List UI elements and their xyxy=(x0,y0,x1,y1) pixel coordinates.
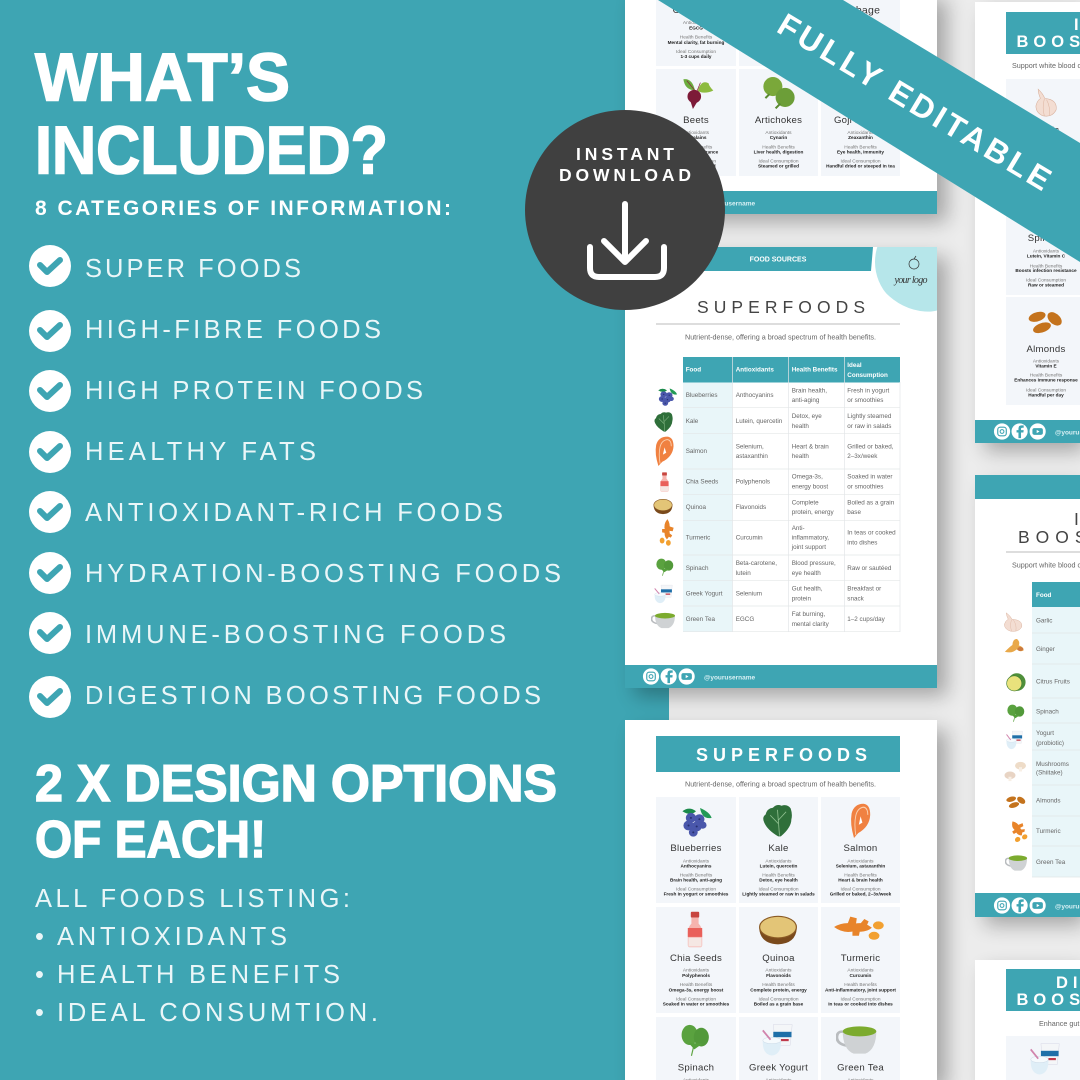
table: Flavonoids xyxy=(736,504,766,511)
table: Lutein, quercetin xyxy=(736,418,783,425)
table: health xyxy=(792,423,809,430)
cell: turmeric: Antioxidants xyxy=(847,968,874,974)
table: Garlic xyxy=(1036,618,1052,624)
cell: turmeric: Turmeric xyxy=(841,953,880,964)
badge: instant download: DOWNLOAD xyxy=(559,165,691,185)
cell: quinoa: Antioxidants xyxy=(765,968,792,974)
table: Beta-carotene, xyxy=(736,560,777,567)
table: or smoothies xyxy=(847,484,883,490)
cell: garlic: Garlic xyxy=(1033,125,1059,136)
cell: quinoa: Quinoa xyxy=(762,953,795,964)
table icons xyxy=(652,388,677,628)
cell: spinach: Raw or steamed xyxy=(1028,283,1064,288)
table: joint support xyxy=(791,544,826,551)
table: Ginger xyxy=(1036,646,1055,653)
header bar: I xyxy=(1074,16,1079,34)
cell: salmon: Heart & brain health xyxy=(838,878,883,883)
table: Blueberries xyxy=(686,392,718,399)
table: Turmeric xyxy=(686,534,710,542)
table: Green Tea xyxy=(1036,859,1066,866)
cell: kale: Detox, eye health xyxy=(759,878,798,883)
header bar xyxy=(1006,12,1080,54)
text block: all foods listing: ALL FOODS LISTING: xyxy=(35,885,350,913)
item: super foods: SUPER FOODS xyxy=(85,255,301,283)
cell: chia seeds: Ideal Consumption xyxy=(676,996,716,1002)
cell: salmon: Grilled or baked, 2–3x/week xyxy=(830,892,892,897)
table: Antioxidants xyxy=(736,366,774,374)
panel: card green tea beets: Green Tea xyxy=(673,5,720,16)
item: super foods xyxy=(29,245,301,287)
table: Soaked in water xyxy=(847,474,892,480)
panel: card green tea beets: Zeaxanthin xyxy=(848,135,873,140)
header bar xyxy=(1006,969,1080,1011)
panel: card green tea beets: Beets xyxy=(683,115,709,126)
table: Grilled or baked, xyxy=(847,444,894,450)
table xyxy=(683,357,900,632)
table: eye health xyxy=(792,570,821,577)
cell: green tea xyxy=(837,1026,884,1080)
table icons xyxy=(1004,613,1031,871)
cell: salmon: Ideal Consumption xyxy=(840,887,881,893)
panel: card green tea beets: Mental clarity, fat burning xyxy=(668,40,724,45)
panel: card green tea beets: Cynarin xyxy=(770,135,787,140)
table: Omega-3s, xyxy=(792,474,823,480)
panel: card green tea beets: Liver health, digestion xyxy=(754,149,804,154)
cell: quinoa xyxy=(750,916,807,1006)
item: immune-boosting foods xyxy=(29,612,506,654)
table: Polyphenols xyxy=(736,478,770,486)
cell: greek yogurt: Greek Yogurt xyxy=(749,1062,808,1074)
cell: greek yogurt xyxy=(749,1025,808,1080)
table: Curcumin xyxy=(736,534,763,542)
text block: all foods listing: • xyxy=(35,961,44,989)
header bar: SUPERFOODS xyxy=(696,745,867,765)
cell: blueberries: Brain health, anti-aging xyxy=(670,878,722,883)
cell: spinach: Health Benefits xyxy=(1030,264,1063,270)
panel: card green tea beets: Cabbage xyxy=(836,4,880,16)
table: Spinach xyxy=(686,565,709,572)
panel: card green tea beets: Antioxidants xyxy=(847,130,874,136)
heading: 2 x design options: 2 X DESIGN OPTIONS xyxy=(35,755,557,813)
cell: almonds: Health Benefits xyxy=(1030,373,1063,379)
panel: card green tea beets: Stamina, endurance xyxy=(674,149,719,154)
table: Heart & brain xyxy=(792,444,829,450)
table: Detox, eye xyxy=(792,413,822,420)
table: Raw or sautéed xyxy=(847,565,892,572)
panel: superfoods grid page xyxy=(625,720,937,1080)
cell: spinach xyxy=(678,1025,714,1080)
panel: card green tea beets: Ideal Consumption xyxy=(676,49,716,55)
cell: blueberries: Health Benefits xyxy=(680,873,713,879)
logo xyxy=(894,256,928,286)
cell: spinach: Boosts infection resistance xyxy=(1015,268,1077,273)
table: Food xyxy=(1036,592,1052,599)
cell: turmeric: Anti-inflammatory, joint support xyxy=(825,987,896,992)
panel: immune boosting grid page xyxy=(975,2,1080,443)
cell: salmon: Selenium, astaxanthin xyxy=(836,863,885,868)
footer bar xyxy=(625,665,937,688)
cell: kale xyxy=(742,805,815,897)
badge: instant download: INSTANT xyxy=(576,144,674,164)
panel: card green tea beets: Antioxidants xyxy=(683,130,710,136)
item: digestion boosting foods: DIGESTION BOOSTING FOODS xyxy=(85,682,541,710)
cell: chia seeds xyxy=(663,912,730,1006)
item: digestion boosting foods xyxy=(29,676,541,718)
table: health xyxy=(792,453,809,460)
panel: card green tea beets: Health Benefits xyxy=(680,144,713,150)
table: (Shiitake) xyxy=(1036,770,1063,776)
panel: card green tea beets: Health Benefits xyxy=(844,144,877,150)
heading: 2 x design options: OF EACH! xyxy=(35,811,266,869)
cell: salmon xyxy=(830,804,892,897)
cell: quinoa: Boiled as a grain base xyxy=(754,1001,804,1006)
cell: almonds: Handful per day xyxy=(1028,393,1064,398)
table: Food xyxy=(686,366,701,374)
cell: almonds: Almonds xyxy=(1026,344,1066,355)
checklist xyxy=(29,245,561,718)
panel: card green tea beets: Health Benefits xyxy=(680,34,713,40)
cell: chia seeds: Polyphenols xyxy=(682,973,710,978)
cell: almonds: Antioxidants xyxy=(1033,359,1060,365)
item: healthy fats: HEALTHY FATS xyxy=(85,438,316,466)
cell: spinach: Antioxidants xyxy=(1033,249,1060,255)
panel: superfoods table page xyxy=(625,247,937,688)
table: Kale xyxy=(686,418,699,425)
table xyxy=(1032,582,1080,877)
page title: I xyxy=(1074,509,1079,529)
text block: all foods listing: IDEAL CONSUMTION. xyxy=(57,999,378,1027)
table: into dishes xyxy=(847,540,877,546)
panel: card green tea beets xyxy=(625,0,937,214)
table: anti-aging xyxy=(792,397,820,404)
heading: what's included: WHAT’S xyxy=(35,40,290,116)
table: Selenium, xyxy=(736,444,764,450)
table: Anthocyanins xyxy=(736,392,774,399)
text block: all foods listing xyxy=(35,885,378,1027)
top banner: FOOD SOURCES xyxy=(750,256,807,264)
cell: kale: Lightly steamed or raw in salads xyxy=(742,892,815,897)
description: Nutrient-dense, offering a broad spectrum of health benefits. xyxy=(685,332,876,342)
cell: kale: Lutein, quercetin xyxy=(760,863,798,868)
table: 2–3x/week xyxy=(847,453,878,460)
logo circle xyxy=(875,247,937,312)
table: Health Benefits xyxy=(792,366,838,374)
footer bar xyxy=(975,893,1080,917)
table: Selenium xyxy=(736,590,762,598)
cell: kale: Antioxidants xyxy=(765,858,792,864)
ribbon: fully editable xyxy=(658,0,1080,262)
icon: yogurt xyxy=(1031,1044,1059,1075)
table: or raw in salads xyxy=(847,423,891,430)
subheading: categories: 8 CATEGORIES OF INFORMATION: xyxy=(35,197,451,220)
page title: SUPERFOODS xyxy=(697,297,865,317)
table: Anti- xyxy=(792,525,805,532)
table: Chia Seeds xyxy=(686,478,718,486)
cell: green tea: Green Tea xyxy=(837,1062,884,1074)
cell: kale: Ideal Consumption xyxy=(758,887,799,893)
table: lutein xyxy=(736,570,751,577)
panel: card green tea beets: Steamed or grilled xyxy=(758,164,799,169)
item: hydration-boosting foods: HYDRATION-BOOSTING FOODS xyxy=(85,560,561,588)
panel: card green tea beets: Ideal Consumption xyxy=(840,159,881,165)
panel: card green tea beets: EGCG xyxy=(689,26,703,30)
cell: salmon: Health Benefits xyxy=(844,873,877,879)
panel: card green tea beets: Eye health, immunity xyxy=(837,149,884,154)
panel: card green tea beets: Antioxidants xyxy=(765,130,792,136)
panel: card green tea beets: Artichokes xyxy=(755,115,802,126)
table: Consumption xyxy=(847,372,888,379)
cell: garlic xyxy=(1033,89,1059,136)
table: Turmeric xyxy=(1036,828,1061,835)
table: Yogurt xyxy=(1036,730,1054,737)
cell: blueberries xyxy=(664,808,729,897)
table: Fat burning, xyxy=(792,611,826,618)
footer bar xyxy=(975,420,1080,443)
item: healthy fats xyxy=(29,431,316,473)
page title xyxy=(1018,509,1080,547)
logo: your logo xyxy=(894,275,928,286)
table: or smoothies xyxy=(847,397,883,404)
cell: blueberries: Blueberries xyxy=(670,843,722,854)
cell: blueberries: Ideal Consumption xyxy=(676,887,716,893)
panel: card green tea beets: Health Benefits xyxy=(762,144,795,150)
table: astaxanthin xyxy=(736,453,768,460)
cell: kale: Kale xyxy=(768,843,789,854)
table: protein xyxy=(792,596,811,602)
table: Quinoa xyxy=(686,504,707,511)
cell: almonds xyxy=(1014,310,1078,398)
cell: almonds: Ideal Consumption xyxy=(1026,388,1066,394)
cell: turmeric: In teas or cooked into dishes xyxy=(828,1001,893,1006)
table: In teas or cooked xyxy=(847,530,896,536)
cell: almonds: Vitamin E xyxy=(1035,364,1057,369)
table: Salmon xyxy=(686,448,708,455)
cell: blueberries: Anthocyanins xyxy=(680,863,712,868)
cell: turmeric: Ideal Consumption xyxy=(840,996,881,1002)
table: Mushrooms xyxy=(1036,761,1069,768)
icon: beets xyxy=(683,79,713,109)
item: antioxidant-rich foods: ANTIOXIDANT-RICH FOODS xyxy=(85,499,503,527)
cell: quinoa: Ideal Consumption xyxy=(758,996,799,1002)
left teal panel xyxy=(0,0,669,1080)
table: inflammatory, xyxy=(792,534,829,542)
table: Brain health, xyxy=(792,388,827,394)
table: Ideal xyxy=(847,362,862,369)
cell: quinoa: Health Benefits xyxy=(762,982,795,988)
table: Complete xyxy=(792,500,819,506)
table: base xyxy=(847,509,861,516)
table: Citrus Fruits xyxy=(1036,678,1070,686)
description: Nutrient-dense, offering a broad spectrum of health benefits. xyxy=(685,780,876,788)
heading: 2 x design options xyxy=(35,755,557,869)
card shadows xyxy=(635,0,1080,1080)
panel: card green tea beets: Roasted or juiced xyxy=(676,164,716,169)
panel: card green tea beets: Betalains xyxy=(686,135,707,140)
item: high protein foods xyxy=(29,370,423,412)
cell: quinoa: Complete protein, energy xyxy=(750,987,807,992)
item: high protein foods: HIGH PROTEIN FOODS xyxy=(85,377,423,405)
text block: all foods listing: • xyxy=(35,923,44,951)
heading: what's included xyxy=(35,40,388,188)
table: Spinach xyxy=(1036,708,1059,716)
cell: chia seeds: Chia Seeds xyxy=(670,953,722,964)
cell: salmon: Salmon xyxy=(843,843,878,854)
panel: card green tea beets: Handful dried or steeped in tea xyxy=(826,164,895,169)
cell: almonds: Enhances immune response xyxy=(1014,378,1078,383)
item: high-fibre foods xyxy=(29,310,381,352)
cell: turmeric: Health Benefits xyxy=(844,982,877,988)
table: EGCG xyxy=(736,616,754,623)
cell: spinach: Lutein, Vitamin C xyxy=(1027,254,1066,259)
table: 1–2 cups/day xyxy=(847,616,886,623)
item: immune-boosting foods: IMMUNE-BOOSTING FOODS xyxy=(85,621,506,649)
panel: digestion boosting page xyxy=(975,960,1080,1080)
panel: card green tea beets: Ideal Consumption xyxy=(758,159,799,165)
cell: quinoa: Flavonoids xyxy=(766,973,791,978)
top banner xyxy=(625,247,873,271)
badge: instant download xyxy=(525,110,725,310)
table: Breakfast or xyxy=(847,586,881,592)
table: Fresh in yogurt xyxy=(847,388,890,394)
icon: download arrow xyxy=(590,204,664,277)
item: high-fibre foods: HIGH-FIBRE FOODS xyxy=(85,316,381,344)
cell: chia seeds: Antioxidants xyxy=(683,968,710,974)
cell: blueberries: Antioxidants xyxy=(683,858,710,864)
cell: turmeric xyxy=(825,917,896,1006)
icon: artichokes xyxy=(763,77,795,108)
cell: salmon: Antioxidants xyxy=(847,858,874,864)
text block: all foods listing: HEALTH BENEFITS xyxy=(57,961,340,989)
table: Greek Yogurt xyxy=(686,590,723,598)
cell: spinach: Spinach xyxy=(1028,233,1064,244)
cell: spinach xyxy=(1015,233,1077,288)
cell: chia seeds: Health Benefits xyxy=(680,982,713,988)
text block: all foods listing: • xyxy=(35,999,44,1027)
cell: spinach: Spinach xyxy=(678,1062,714,1074)
table: Boiled as a grain xyxy=(847,500,895,506)
item: antioxidant-rich foods xyxy=(29,491,503,533)
table: (probiotic) xyxy=(1036,740,1064,747)
panel: card green tea beets: Goji Berries xyxy=(834,115,887,126)
cell: blueberries: Fresh in yogurt or smoothies xyxy=(664,892,729,897)
table: Blood pressure, xyxy=(792,560,836,567)
table: mental clarity xyxy=(792,621,830,628)
heading: what's included: INCLUDED? xyxy=(35,112,388,188)
table: energy boost xyxy=(792,484,828,490)
footer bar: @yourusername xyxy=(704,674,756,682)
header bar xyxy=(656,736,900,772)
table: Gut health, xyxy=(792,586,823,592)
panel: card green tea beets: @yourusername xyxy=(704,200,756,208)
panel: card green tea beets: 1-3 cups daily xyxy=(680,54,712,59)
table: snack xyxy=(847,596,865,602)
cell: kale: Health Benefits xyxy=(762,873,795,879)
panel: immune boosting table page xyxy=(975,475,1080,917)
panel: card green tea beets: Ideal Consumption xyxy=(676,159,716,165)
panel: card green tea beets: Antioxidants xyxy=(683,20,710,26)
table: protein, energy xyxy=(792,509,835,516)
table: Lightly steamed xyxy=(847,413,892,420)
table: Almonds xyxy=(1036,798,1060,804)
item: hydration-boosting foods xyxy=(29,552,561,594)
text block: all foods listing: ANTIOXIDANTS xyxy=(57,923,287,951)
table: Green Tea xyxy=(686,616,715,623)
cell: chia seeds: Omega-3s, energy boost xyxy=(669,987,724,992)
ribbon: fully editable: FULLY EDITABLE xyxy=(771,6,1057,198)
cell: spinach: Ideal Consumption xyxy=(1026,278,1066,284)
cell: chia seeds: Soaked in water or smoothies xyxy=(663,1001,730,1006)
cell: turmeric: Curcumin xyxy=(850,973,872,978)
